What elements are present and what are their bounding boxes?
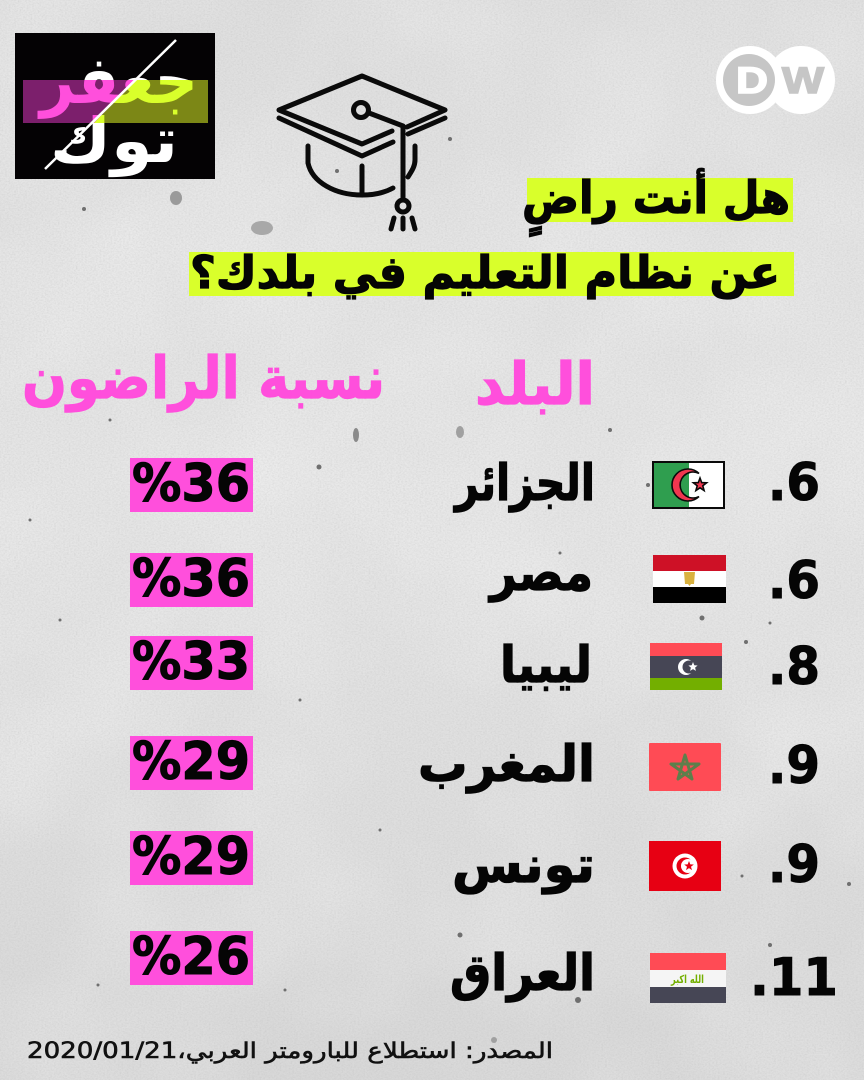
DW logo bbox=[716, 46, 835, 114]
DW logo: W bbox=[782, 60, 824, 101]
row: Tunisia bbox=[130, 827, 820, 895]
row: Tunisia: %29 bbox=[132, 827, 250, 887]
row: Egypt: .6 bbox=[768, 551, 820, 611]
row: Iraq: الله اكبر bbox=[670, 973, 704, 986]
row: Iraq: %26 bbox=[132, 927, 250, 987]
row: Egypt: مصر bbox=[487, 544, 593, 603]
row: Libya: .8 bbox=[768, 637, 820, 697]
logo: Jaafar Talk bbox=[15, 33, 215, 179]
icon: graduation cap bbox=[279, 76, 445, 229]
row: Morocco bbox=[130, 732, 820, 796]
row: Libya bbox=[130, 632, 820, 697]
column heading: satisfied share: نسبة الراضون bbox=[22, 344, 385, 413]
DW logo: D bbox=[736, 60, 768, 101]
logo: Jaafar Talk: جعفر bbox=[37, 42, 198, 119]
row: Libya: %33 bbox=[132, 632, 250, 692]
logo: Jaafar Talk: توك bbox=[50, 104, 178, 177]
column heading: country: البلد bbox=[475, 350, 595, 418]
row: Iraq: .11 bbox=[750, 948, 838, 1008]
row: Morocco: .9 bbox=[768, 736, 820, 796]
logo: Jaafar Talk: جعفر bbox=[37, 42, 198, 119]
row: Algeria: الجزائر bbox=[453, 454, 595, 513]
row: Iraq bbox=[130, 927, 838, 1008]
question heading: هل أنت راضٍ bbox=[522, 168, 790, 237]
question heading: عن نظام التعليم في بلدك؟ bbox=[190, 246, 780, 299]
source note: المصدر: استطلاع للبارومتر العربي،2020/01/21 bbox=[27, 1039, 553, 1064]
row: Algeria: %36 bbox=[132, 454, 250, 514]
row: Libya: ليبيا bbox=[500, 636, 592, 694]
row: Egypt: %36 bbox=[132, 549, 250, 609]
row: Algeria bbox=[130, 453, 820, 514]
logo: Jaafar Talk: توك bbox=[50, 104, 178, 177]
row: Algeria: .6 bbox=[768, 453, 820, 513]
row: Egypt bbox=[130, 544, 820, 611]
question heading bbox=[189, 168, 794, 299]
row: Iraq: العراق bbox=[450, 944, 595, 1003]
logo: Jaafar Talk: توك bbox=[50, 104, 178, 177]
row: Morocco: %29 bbox=[132, 732, 250, 792]
logo: Jaafar Talk: جعفر bbox=[37, 42, 198, 119]
row: Morocco: المغرب bbox=[418, 735, 595, 794]
row: Tunisia: .9 bbox=[768, 835, 820, 895]
row: Tunisia: تونس bbox=[452, 836, 595, 895]
